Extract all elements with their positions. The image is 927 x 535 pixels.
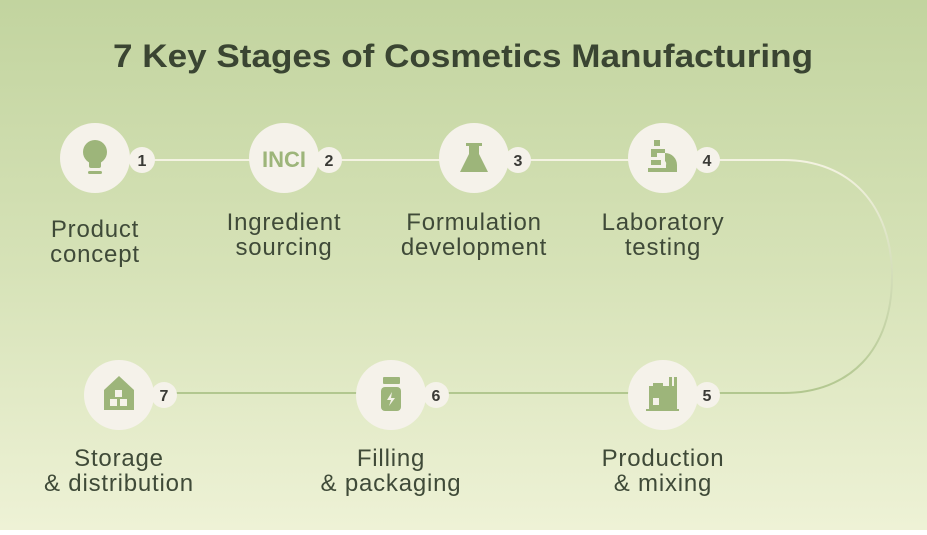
step 5: production & mixing: Production <box>602 445 724 472</box>
step 7: storage & distribution: Storage <box>74 445 164 472</box>
connector path <box>141 160 892 393</box>
step 2: ingredient sourcing: 2 <box>325 153 334 170</box>
step 7: storage & distribution <box>44 360 194 497</box>
step 5: production & mixing <box>602 360 724 497</box>
step 5: production & mixing: 5 <box>703 388 712 405</box>
step 3: formulation development <box>401 123 547 261</box>
icon: flask <box>460 143 488 172</box>
step 2: ingredient sourcing <box>227 123 342 261</box>
icon: INCI: INCI <box>262 147 306 172</box>
icon: microscope <box>648 140 677 172</box>
step 2: ingredient sourcing: Ingredient <box>227 209 341 236</box>
step 1: product concept: 1 <box>138 153 147 170</box>
step 2: ingredient sourcing: sourcing <box>235 234 333 261</box>
step 6: filling & packaging <box>321 360 461 497</box>
icon: jar <box>381 377 401 411</box>
step 1: product concept <box>50 123 155 268</box>
step 6: filling & packaging: & packaging <box>321 470 461 497</box>
step 4: laboratory testing: Laboratory <box>602 209 724 236</box>
step 1: product concept: Product <box>51 216 139 243</box>
icon: factory <box>646 377 679 411</box>
step 5: production & mixing: & mixing <box>614 470 712 497</box>
step 1: product concept: concept <box>50 241 140 268</box>
icon: lightbulb <box>83 140 107 174</box>
step 4: laboratory testing <box>602 123 724 261</box>
icon: warehouse <box>104 376 134 410</box>
step 3: formulation development: 3 <box>514 153 523 170</box>
step 6: filling & packaging: Filling <box>357 445 425 472</box>
step 4: laboratory testing: testing <box>625 234 701 261</box>
title: 7 Key Stages of Cosmetics Manufacturing <box>113 38 813 74</box>
step 3: formulation development: Formulation <box>406 209 542 236</box>
step 3: formulation development: development <box>401 234 547 261</box>
step 4: laboratory testing: 4 <box>703 153 712 170</box>
step 6: filling & packaging: 6 <box>432 388 441 405</box>
step 7: storage & distribution: 7 <box>160 388 169 405</box>
step 7: storage & distribution: & distribution <box>44 470 194 497</box>
